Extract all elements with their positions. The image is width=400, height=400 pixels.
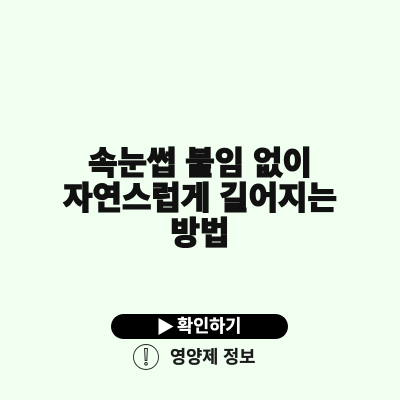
title: 속눈썹 붙임 없이	[88, 145, 312, 181]
icon: play triangle	[158, 318, 174, 335]
button label: 확인하기	[177, 316, 241, 336]
title	[62, 145, 337, 251]
title: 방법	[171, 215, 229, 251]
link text: nutrient info: 영양제 정보	[170, 347, 255, 367]
title: 자연스럽게 길어지는	[63, 180, 337, 216]
button: confirm	[111, 314, 288, 339]
icon: exclamation circle	[133, 344, 159, 370]
